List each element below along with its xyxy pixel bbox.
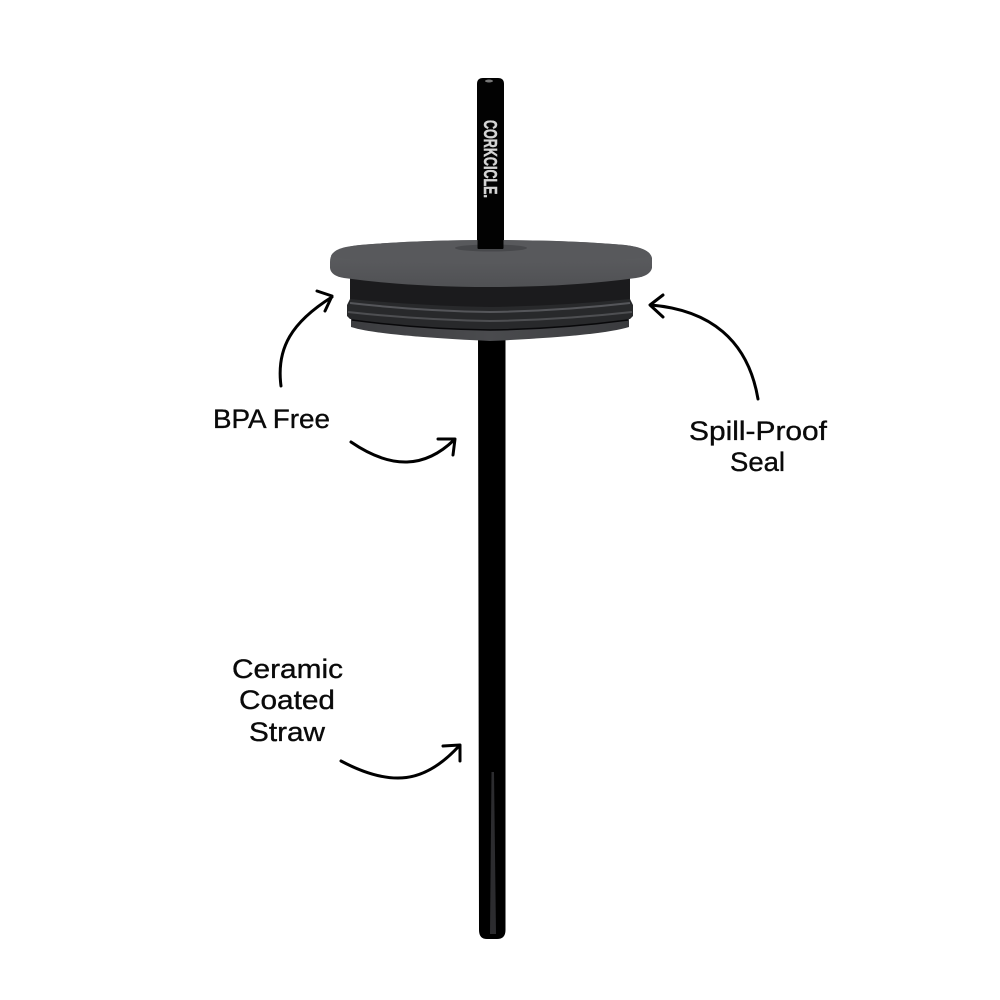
label: Spill-Proof Seal — [689, 416, 828, 477]
lid — [330, 236, 652, 341]
label: Ceramic Coated Straw: Straw — [249, 717, 326, 747]
lid base band — [351, 316, 629, 341]
arrow: ceramic straw — [341, 745, 460, 778]
straw collar — [455, 244, 527, 252]
label: Ceramic Coated Straw: Coated — [239, 685, 335, 715]
label: Ceramic Coated Straw: Ceramic — [232, 654, 343, 684]
arrow: spill-proof seal — [650, 295, 758, 399]
label: Spill-Proof Seal: Seal — [730, 447, 785, 477]
label: Ceramic Coated Straw — [232, 654, 343, 747]
label: BPA Free: BPA Free — [213, 404, 330, 434]
lid neck — [350, 276, 630, 326]
lid side — [330, 240, 652, 287]
lid threads — [347, 299, 633, 330]
label: Spill-Proof Seal: Spill-Proof — [689, 416, 828, 446]
upper straw — [477, 78, 504, 250]
lower straw — [478, 336, 506, 939]
straw logo: CORKCICLE. — [480, 120, 500, 198]
arrow: BPA to straw — [351, 439, 455, 462]
lid top surface — [331, 240, 651, 264]
straw base in lid — [478, 236, 504, 249]
arrow: BPA to lid — [280, 291, 332, 386]
